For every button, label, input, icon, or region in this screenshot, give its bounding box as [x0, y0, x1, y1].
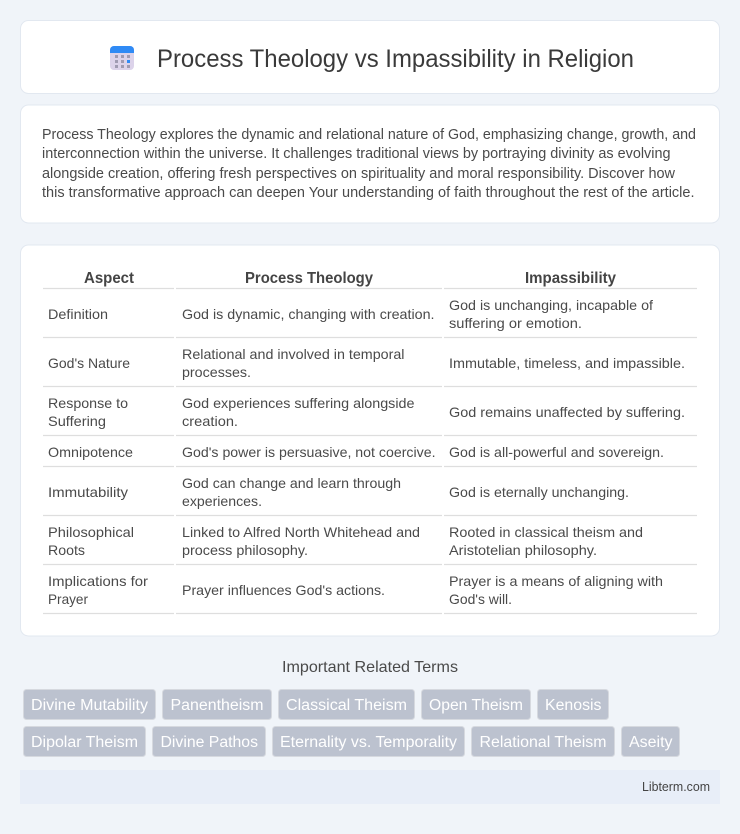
row: god's nature: Relational and involved in temporal: [182, 346, 404, 362]
row: immutability: [48, 475, 629, 509]
row: immutability: God can change and learn through: [182, 475, 401, 491]
row: god's nature: processes.: [182, 364, 251, 380]
row: god's nature: [48, 346, 685, 380]
footer credit: Libterm.com: [642, 780, 710, 794]
row: god's nature: God's Nature: [48, 355, 130, 371]
related term tags: [24, 690, 680, 756]
header panel: [20, 20, 720, 94]
intro text: Process Theology explores the dynamic and relational nature of God, emphasizing change, growth, and: [42, 127, 696, 143]
row: philosophical roots: [48, 524, 643, 558]
row: definition: Definition: [48, 306, 108, 322]
related term tags: Panentheism: [170, 697, 264, 714]
related term tags: Divine Pathos: [160, 734, 258, 751]
row: response to suffering: God remains unaffected by suffering.: [449, 404, 685, 420]
row: implications for prayer: Prayer: [48, 591, 88, 607]
footer: [20, 770, 720, 804]
row: implications for prayer: Prayer is a means of aligning with: [449, 573, 663, 589]
row: immutability: experiences.: [182, 493, 262, 509]
row: implications for prayer: God's will.: [449, 591, 512, 607]
intro text: interconnection within the universe. It challenges traditional views by portraying divinity as evolving: [42, 146, 670, 162]
intro text: alongside creation, offering fresh perspectives on spirituality and moral responsibility. Discover how: [42, 166, 676, 182]
row: implications for prayer: Prayer influences God's actions.: [182, 582, 385, 598]
related term tags: Divine Mutability: [31, 697, 148, 714]
table header: Aspect: [84, 270, 134, 287]
row: implications for prayer: Implications for: [48, 573, 148, 589]
row: philosophical roots: Rooted in classical theism and: [449, 524, 643, 540]
related term tags: Kenosis: [545, 697, 602, 714]
row: god's nature: Immutable, timeless, and impassible.: [449, 355, 685, 371]
row: response to suffering: Suffering: [48, 413, 106, 429]
row: philosophical roots: Roots: [48, 542, 85, 558]
related term tags: Open Theism: [429, 697, 523, 714]
row: definition: God is unchanging, incapable of: [449, 297, 653, 313]
table header: Impassibility: [525, 270, 616, 287]
row: response to suffering: Response to: [48, 395, 128, 411]
related term tags: Relational Theism: [480, 734, 606, 751]
row: definition: [48, 297, 653, 331]
title: Process Theology vs Impassibility in Religion: [157, 45, 634, 73]
table header: Process Theology: [245, 270, 373, 287]
row: philosophical roots: Aristotelian philosophy.: [449, 542, 597, 558]
related term tags: Dipolar Theism: [31, 734, 138, 751]
intro text: [42, 127, 696, 201]
table header: [84, 270, 616, 287]
row: immutability: God is eternally unchanging.: [449, 484, 629, 500]
row: omnipotence: [48, 444, 664, 460]
related term tags: Eternality vs. Temporality: [280, 734, 457, 751]
row: response to suffering: [48, 395, 685, 429]
row: philosophical roots: process philosophy.: [182, 542, 308, 558]
row: omnipotence: God is all-powerful and sovereign.: [449, 444, 664, 460]
icon: calendar: [110, 46, 134, 70]
row: response to suffering: creation.: [182, 413, 238, 429]
row: omnipotence: Omnipotence: [48, 444, 133, 460]
row: immutability: Immutability: [48, 484, 128, 500]
intro text: this transformative approach can deepen Your understanding of faith throughout the rest of the article.: [42, 185, 695, 201]
row: philosophical roots: Linked to Alfred North Whitehead and: [182, 524, 420, 540]
heading: important related terms: Important Related Terms: [282, 659, 458, 676]
related term tags: Classical Theism: [286, 697, 407, 714]
row: omnipotence: God's power is persuasive, not coercive.: [182, 444, 436, 460]
panel: comparison table: [20, 245, 720, 636]
panel: introduction: [20, 105, 720, 223]
row: response to suffering: God experiences suffering alongside: [182, 395, 415, 411]
row: philosophical roots: Philosophical: [48, 524, 134, 540]
row: implications for prayer: [48, 573, 663, 607]
related term tags: Aseity: [629, 734, 673, 751]
row: definition: suffering or emotion.: [449, 315, 582, 331]
row: definition: God is dynamic, changing with creation.: [182, 306, 434, 322]
